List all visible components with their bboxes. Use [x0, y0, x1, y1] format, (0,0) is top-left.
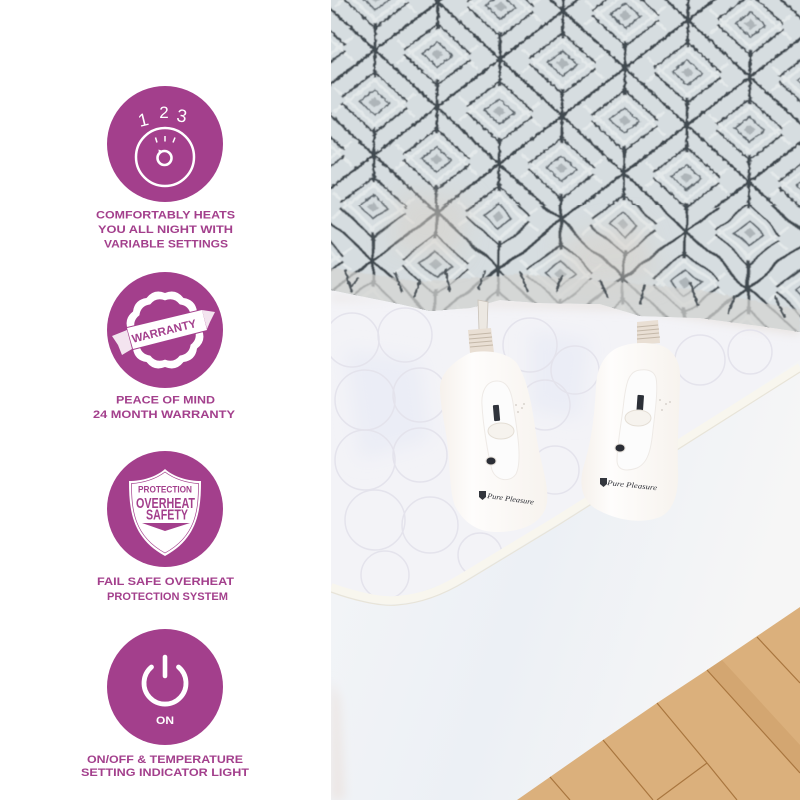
caption: overheat safety: FAIL SAFE OVERHEAT — [97, 576, 234, 588]
icon: protection shield: SAFETY — [146, 508, 188, 524]
caption: variable heat settings: YOU ALL NIGHT WITH — [98, 224, 233, 236]
photo: left control remote — [440, 300, 547, 532]
photo: wood floor — [517, 607, 800, 800]
icon: warranty seal — [107, 272, 223, 388]
photo: grey patterned plush blanket — [320, 0, 800, 350]
icon: warranty seal: WARRANTY — [131, 318, 198, 346]
caption: warranty: PEACE OF MIND — [116, 394, 215, 406]
icon: heat dial: 1 — [136, 109, 151, 131]
photo: beige sheen on blanket — [390, 190, 660, 290]
icon: power button: ON — [156, 715, 174, 727]
caption: overheat safety — [97, 576, 234, 603]
photo: right control remote: Pure Pleasure — [606, 478, 658, 492]
icon: protection shield: PROTECTION — [138, 484, 192, 494]
caption: indicator light: ON/OFF & TEMPERATURE — [87, 754, 243, 766]
caption: indicator light — [81, 754, 249, 779]
icon: heat dial: 3 — [175, 105, 188, 127]
caption: warranty: 24 MONTH WARRANTY — [93, 409, 236, 421]
caption: variable heat settings — [96, 210, 235, 250]
caption: variable heat settings: VARIABLE SETTINGS — [104, 238, 228, 250]
caption: overheat safety: PROTECTION SYSTEM — [107, 591, 228, 603]
photo: pad binding — [331, 367, 800, 600]
caption: indicator light: SETTING INDICATOR LIGHT — [81, 767, 249, 779]
feature 4: indicator light — [81, 629, 249, 779]
left white panel — [0, 0, 331, 800]
photo: blanket fringe — [331, 268, 800, 332]
icon: heat dial — [107, 86, 223, 202]
icon: protection shield: OVERHEAT — [136, 496, 195, 512]
photo: sheet shadow left — [331, 680, 345, 800]
icon: power button — [107, 629, 223, 745]
photo: left control remote: Pure Pleasure — [486, 491, 535, 507]
photo: right control remote — [581, 320, 680, 521]
feature 1: variable heat settings — [96, 86, 235, 250]
caption: warranty — [93, 394, 236, 421]
photo: white sheet — [331, 300, 800, 800]
feature 3: overheat safety — [97, 451, 234, 603]
caption: variable heat settings: COMFORTABLY HEATS — [96, 210, 235, 222]
photo: heated blanket remotes on bed — [320, 0, 800, 800]
feature 2: warranty — [93, 272, 236, 421]
photo: quilted pad — [325, 285, 800, 605]
icon: protection shield — [107, 451, 223, 567]
icon: heat dial: 2 — [159, 103, 169, 122]
